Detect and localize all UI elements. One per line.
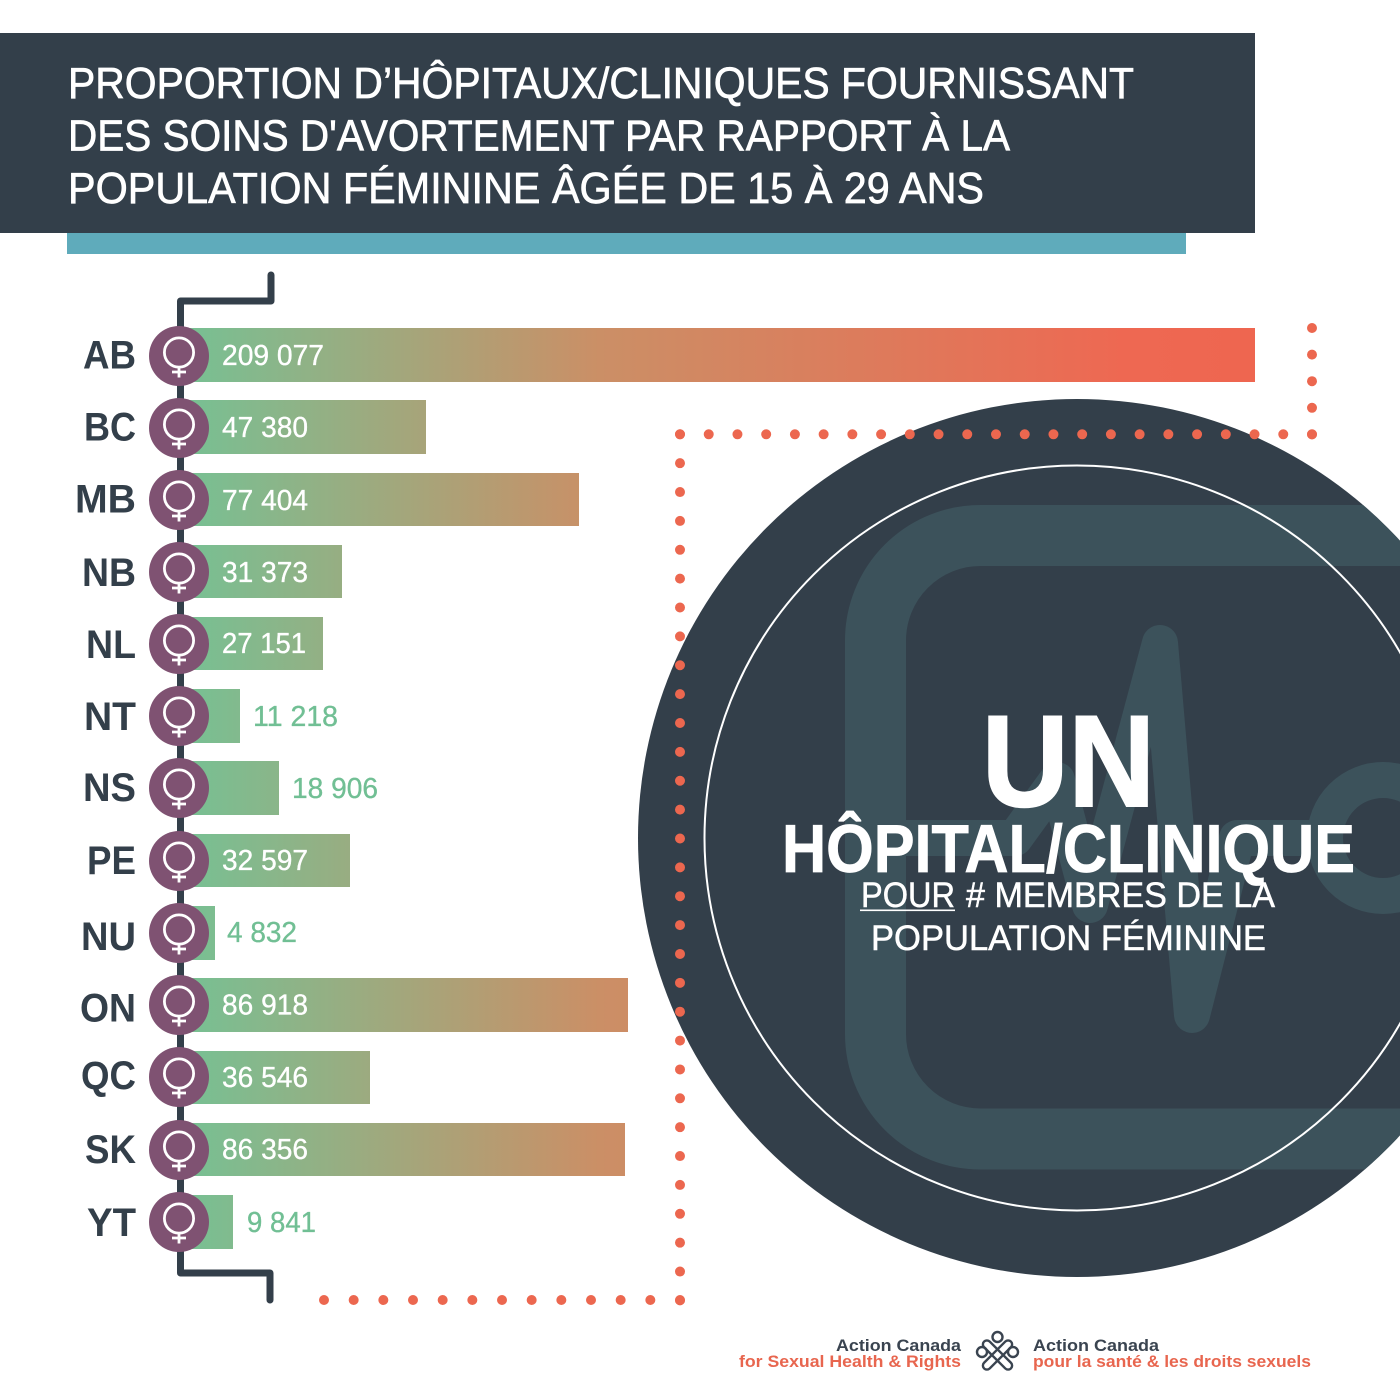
province labels: NB: [82, 551, 136, 595]
logo: Action Canada: Action Canada: [836, 1336, 962, 1355]
central callout text: POPULATION FÉMININE: [871, 919, 1266, 958]
province labels: NS: [83, 766, 136, 810]
province labels: [75, 334, 136, 1245]
title banner: PROPORTION D’HÔPITAUX/CLINIQUES FOURNISSANT: [68, 58, 1134, 108]
dotted frame: [324, 328, 1313, 1301]
logo: Action Canada: Action Canada: [1033, 1336, 1160, 1355]
central callout text: [782, 688, 1355, 958]
province labels: NL: [86, 623, 136, 667]
bar values: 47 380: [222, 412, 308, 444]
province labels: ON: [80, 986, 136, 1030]
bar values: 86 356: [222, 1134, 308, 1166]
province labels: NT: [84, 695, 136, 739]
bar values: 9 841: [247, 1207, 316, 1239]
bar values: 27 151: [222, 628, 306, 660]
icon: logo mark: [977, 1332, 1018, 1371]
bar values: 4 832: [227, 917, 297, 949]
bar values: 31 373: [222, 557, 308, 589]
province labels: MB: [75, 478, 136, 522]
bar values: 86 918: [222, 990, 308, 1022]
bar values: 209 077: [222, 340, 324, 372]
bar values: 18 906: [292, 773, 378, 805]
big dark circle: [638, 399, 1400, 1277]
logo: Action Canada: pour la santé & les droits sexuels: [1033, 1352, 1311, 1371]
central callout text: POUR: [861, 876, 955, 915]
chart axis bracket: [180, 275, 271, 1300]
province labels: AB: [83, 334, 136, 378]
province labels: QC: [81, 1054, 136, 1098]
province labels: SK: [85, 1128, 136, 1172]
female icons column: [149, 326, 209, 1252]
bar values: [222, 340, 378, 1239]
bar chart: AB to YT: [180, 328, 1255, 1249]
central callout text: # MEMBRES DE LA: [966, 876, 1276, 915]
title banner: POPULATION FÉMININE ÂGÉE DE 15 À 29 ANS: [68, 164, 984, 213]
teal accent bar: [67, 233, 1186, 254]
logo: Action Canada: [739, 1332, 1311, 1371]
bar values: 36 546: [222, 1062, 308, 1094]
thin white inner ring: [704, 466, 1400, 1210]
bar values: 11 218: [253, 701, 338, 733]
province labels: YT: [87, 1201, 136, 1245]
province labels: PE: [87, 839, 136, 883]
bar values: 77 404: [222, 485, 308, 517]
icon: monitor with heartbeat: [876, 536, 1400, 1139]
province labels: NU: [81, 915, 136, 959]
central callout text: UN: [982, 688, 1155, 834]
province labels: BC: [84, 406, 136, 450]
title banner: [0, 33, 1255, 233]
bar values: 32 597: [222, 845, 308, 877]
title banner: DES SOINS D'AVORTEMENT PAR RAPPORT À LA: [68, 112, 1011, 160]
logo: Action Canada: for Sexual Health & Rights: [739, 1352, 961, 1371]
